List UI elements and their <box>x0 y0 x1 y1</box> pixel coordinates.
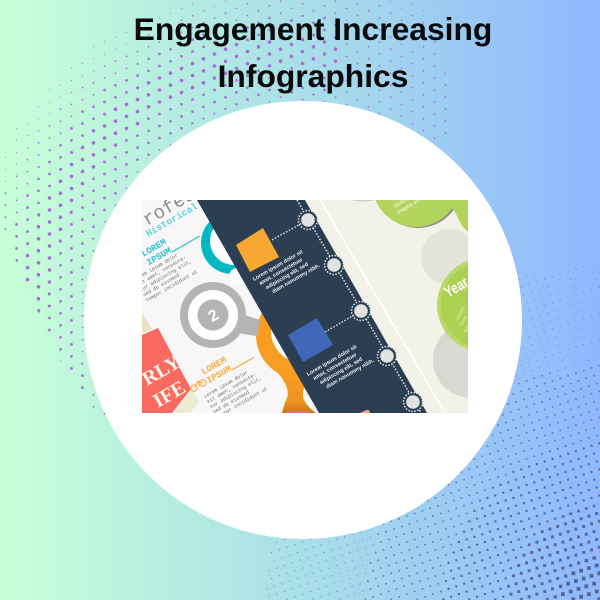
text block two: Lorem ipsum dolor sit <box>306 344 358 378</box>
infographic preview image <box>142 200 468 413</box>
text block one <box>252 250 320 293</box>
green circle top: magna ali <box>396 198 421 216</box>
title: Engagement Increasing <box>134 11 492 47</box>
orange text block <box>204 371 268 413</box>
text block two <box>306 345 374 388</box>
teal section label: IPSUM <box>145 246 173 268</box>
gray circles <box>421 229 468 398</box>
teal text block: sit amet, consecte- <box>136 255 187 288</box>
orange section label <box>202 356 254 384</box>
orange text block: tempor incididunt ut <box>215 386 269 421</box>
coral early life block: RLY <box>138 351 185 390</box>
text block one: adipiscing elit, sed <box>265 262 310 291</box>
orange circle <box>256 313 316 413</box>
orange square <box>236 228 279 272</box>
orange text block: sit amet, consecte- <box>206 372 257 405</box>
orange text block: Lorem ipsum dolor <box>203 370 249 400</box>
teal section label <box>142 236 200 266</box>
connector lines <box>272 222 356 332</box>
green circle year: adip <box>463 323 473 334</box>
green circle year: cons <box>459 314 469 327</box>
right page <box>306 200 468 413</box>
timeline nodes <box>298 210 422 412</box>
teal text block: Lorem ipsum dolor <box>133 253 179 283</box>
heading text: Historical: rofes <box>139 184 199 231</box>
pink fragments <box>285 410 370 413</box>
text block one: Lorem ipsum dolor sit <box>252 249 304 283</box>
left page <box>142 200 316 413</box>
text block one: diam nonummy nibh. <box>271 263 322 295</box>
teal section label: LOREM <box>140 237 168 259</box>
orange text block: sed do eiusmod <box>212 390 251 415</box>
orange section label: LOREM <box>200 355 228 377</box>
orange text block: tur adipiscing elit, <box>209 376 263 410</box>
teal text block: tur adipiscing elit, <box>139 259 193 293</box>
heading text: Historical: Historical <box>144 201 200 240</box>
green circle top: ididunt <box>393 195 412 210</box>
green circle year <box>437 260 468 350</box>
gray circle number 2: 2 <box>206 307 222 326</box>
dark timeline band <box>197 200 427 413</box>
coral early life block <box>138 313 199 413</box>
teal text block: sed do eiusmod <box>142 273 181 298</box>
teal text block: tempor incididunt ut <box>145 269 199 304</box>
title <box>134 11 492 94</box>
coral early life block: IFE <box>150 377 189 412</box>
text block one: amet, consectetuer <box>258 257 305 287</box>
timeline dotted line <box>297 200 421 413</box>
green circle year: Year <box>442 274 472 301</box>
text block two: diam nonummy nibh. <box>325 358 376 390</box>
teal text block <box>142 254 198 302</box>
icon: bicycle <box>191 380 206 391</box>
text block two: adipiscing elit, sed <box>319 357 364 386</box>
green circle top <box>352 200 468 232</box>
teal circle <box>201 222 244 286</box>
blue square <box>288 318 333 362</box>
title: Infographics <box>218 58 408 94</box>
orange section label: IPSUM <box>205 364 233 386</box>
text block two: amet, consectetuer <box>312 352 359 382</box>
green circle year: Lorem <box>455 306 467 321</box>
gray circle number 2 <box>180 282 260 348</box>
